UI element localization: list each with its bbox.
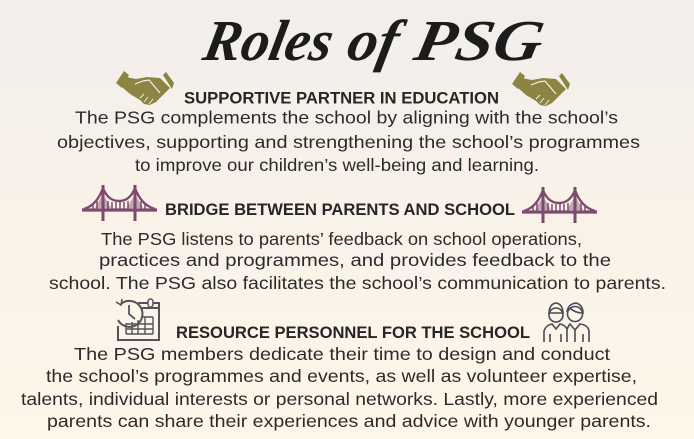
title: of — [342, 9, 411, 73]
icon: bridge right — [522, 187, 597, 223]
text block: resource personnel: talents, individual interests or personal networks. Lastly, more experienced — [21, 389, 658, 409]
text block: bridge: school. The PSG also facilitates the school’s communication to parents. — [49, 273, 666, 293]
icon: bridge left — [82, 185, 157, 221]
title: PSG — [408, 9, 549, 73]
title: Roles — [197, 9, 339, 73]
text block: bridge — [49, 229, 666, 293]
text block: supportive partner: to improve our children’s well-being and learning. — [135, 155, 539, 175]
text block: bridge: practices and programmes, and provides feedback to the — [99, 250, 611, 270]
text block: supportive partner: The PSG complements the school by aligning with the school’s — [75, 108, 618, 128]
icon: two people — [544, 303, 589, 342]
text block: resource personnel — [21, 344, 658, 431]
heading: supportive partner: SUPPORTIVE PARTNER IN EDUCATION — [184, 90, 499, 108]
heading: bridge: BRIDGE BETWEEN PARENTS AND SCHOOL — [165, 201, 515, 219]
text block: bridge: The PSG listens to parents’ feedback on school operations, — [101, 229, 582, 249]
panel: supportive partner — [57, 71, 640, 175]
text block: supportive partner: objectives, supporting and strengthening the school’s programmes — [57, 132, 640, 152]
icon: handshake left — [116, 71, 174, 105]
heading: resource personnel: RESOURCE PERSONNEL FOR THE SCHOOL — [176, 324, 530, 342]
title — [197, 9, 549, 73]
text block: resource personnel: The PSG members dedicate their time to design and conduct — [74, 344, 610, 364]
icon: clock and calendar — [116, 299, 159, 340]
text block: resource personnel: parents can share their experiences and advice with younger parents. — [47, 411, 651, 431]
text block: resource personnel: the school’s programmes and events, as well as volunteer expertise, — [46, 366, 637, 386]
panel: resource personnel — [21, 299, 658, 431]
icon: handshake right — [512, 72, 570, 106]
panel: bridge — [49, 185, 666, 293]
text block: supportive partner — [57, 108, 640, 175]
